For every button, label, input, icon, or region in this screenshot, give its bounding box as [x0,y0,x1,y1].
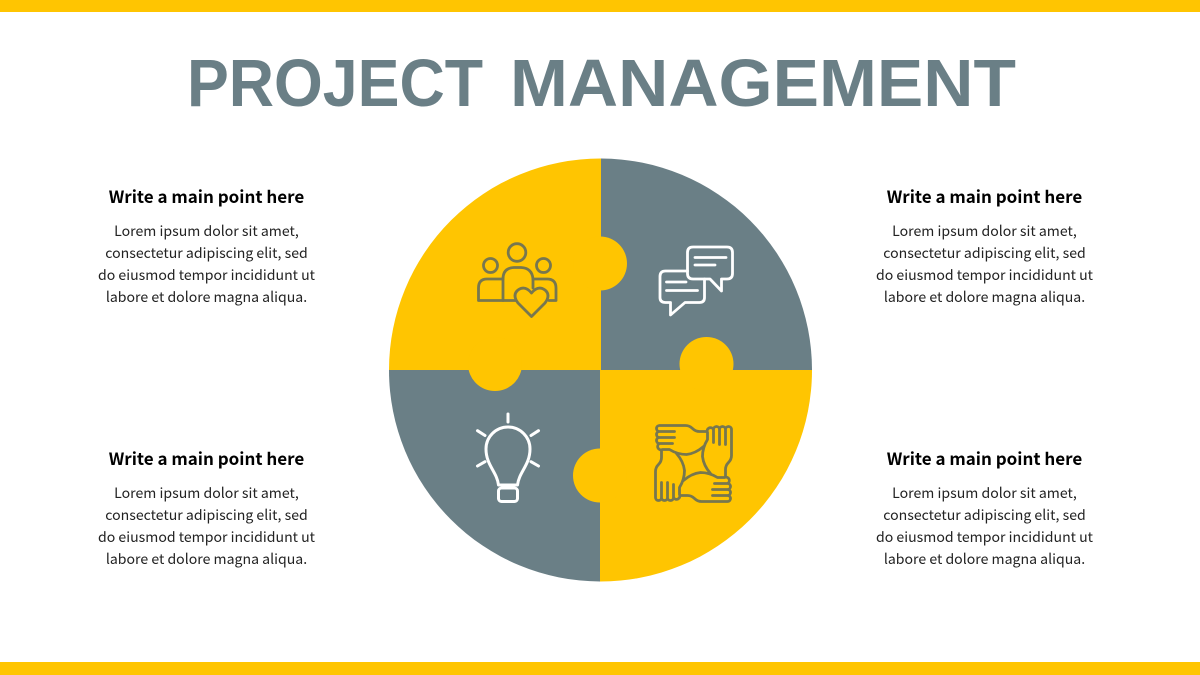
text block: bottom right: Write a main point here [887,445,1082,470]
hand: bottom [680,472,730,502]
text block: top left: Lorem ipsum dolor sit amet, [114,221,299,241]
text block: top left: consectetur adipiscing elit, sed [105,243,308,263]
icon: chat bubbles [660,247,732,315]
text block: top right: do eiusmod tempor incididunt ut [876,265,1093,285]
puzzle piece: top right grey [601,158,812,370]
text block: bottom left: Write a main point here [109,445,304,470]
title: PROJECT [187,46,483,121]
icon: four interlocking hands [656,426,732,502]
top bar [0,0,1200,12]
text block: bottom right: Lorem ipsum dolor sit amet, [892,483,1077,503]
text block: top right: Write a main point here [887,183,1082,208]
text block: top right [876,183,1093,307]
icon: team with heart [478,244,556,316]
text block: top left [98,183,315,307]
title: MANAGEMENT [510,46,1016,121]
text block: bottom left: labore et dolore magna aliqua. [106,549,307,569]
text block: bottom left: Lorem ipsum dolor sit amet, [114,483,299,503]
text block: top left: labore et dolore magna aliqua. [106,287,307,307]
text block: bottom right: do eiusmod tempor incididunt ut [876,527,1093,547]
text block: top left: do eiusmod tempor incididunt ut [98,265,315,285]
text block: bottom left: do eiusmod tempor incididunt ut [98,527,315,547]
puzzle piece: bottom left grey [389,370,600,582]
hand: top [656,426,706,454]
hand: right [702,426,732,476]
text block: bottom left: consectetur adipiscing elit, sed [105,505,308,525]
text block: bottom left [98,445,315,569]
text block: bottom right [876,445,1093,569]
hand: left [656,450,684,500]
text block: top right: Lorem ipsum dolor sit amet, [892,221,1077,241]
puzzle piece: bottom right yellow with knobs [573,337,812,582]
title [187,46,1016,121]
puzzle piece: top left yellow with knobs [389,158,627,391]
text block: top left: Write a main point here [109,183,304,208]
text block: top right: consectetur adipiscing elit, sed [883,243,1086,263]
text block: bottom right: consectetur adipiscing elit, sed [883,505,1086,525]
bottom bar [0,662,1200,675]
icon: light bulb [478,414,538,502]
text block: bottom right: labore et dolore magna aliqua. [884,549,1085,569]
text block: top right: labore et dolore magna aliqua. [884,287,1085,307]
